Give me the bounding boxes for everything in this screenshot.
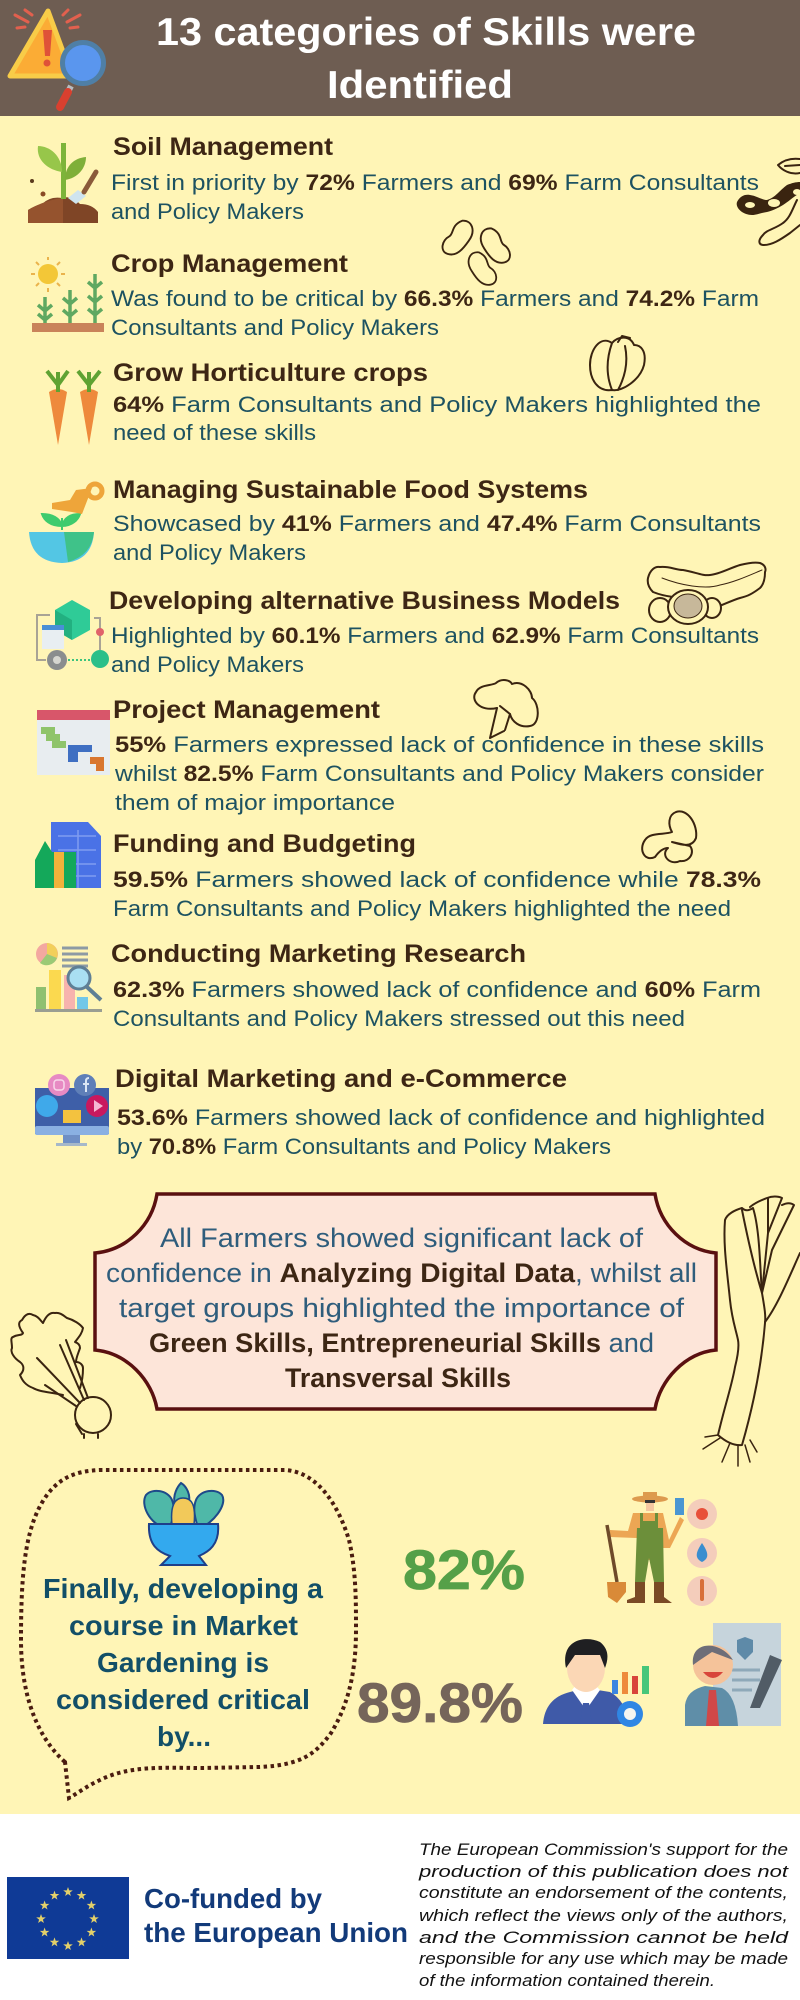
heading: Conducting Marketing Research bbox=[111, 940, 526, 968]
callout text bbox=[106, 1223, 697, 1393]
bubble text: Finally, developing a bbox=[43, 1573, 323, 1604]
heading: Crop Management bbox=[111, 250, 349, 278]
text block: Consultants and Policy Makers bbox=[111, 315, 439, 340]
bubble text: considered critical bbox=[56, 1684, 310, 1715]
icon: warning and magnifier bbox=[10, 10, 104, 107]
callout text: target groups highlighted the importance of bbox=[119, 1293, 685, 1323]
text block: and Policy Makers bbox=[111, 199, 304, 224]
title: 13 categories of Skills were bbox=[156, 11, 696, 54]
funding text: Co-funded by bbox=[144, 1883, 322, 1914]
text block bbox=[113, 392, 761, 445]
funding text: the European Union bbox=[144, 1917, 408, 1948]
text block: and Policy Makers bbox=[111, 652, 304, 677]
icon: gantt chart bbox=[37, 710, 110, 775]
text block: 55% Farmers expressed lack of confidence in these skills bbox=[115, 732, 764, 757]
statistic: 82%: 82% bbox=[403, 1538, 525, 1601]
icon: salad bowl bbox=[144, 1483, 223, 1565]
heading: Managing Sustainable Food Systems bbox=[113, 476, 588, 504]
callout text: Transversal Skills bbox=[285, 1363, 511, 1393]
illustration: bell pepper bbox=[590, 336, 645, 390]
heading: Project Management bbox=[113, 696, 381, 724]
section: Project Management bbox=[37, 696, 764, 815]
icon: sun and crop rows bbox=[31, 257, 104, 332]
icon: business process bbox=[37, 600, 109, 670]
text block: and Policy Makers bbox=[113, 540, 306, 565]
callout frame bbox=[95, 1194, 716, 1409]
text block: Was found to be critical by 66.3% Farmers and 74.2% Farm bbox=[111, 286, 759, 311]
illustration: leek bbox=[703, 1196, 800, 1466]
callout bbox=[95, 1194, 716, 1409]
text block: 59.5% Farmers showed lack of confidence while 78.3% bbox=[113, 867, 761, 892]
text block: whilst 82.5% Farm Consultants and Policy Makers consider bbox=[114, 761, 764, 786]
icon: carrots bbox=[47, 371, 100, 445]
bubble text bbox=[43, 1573, 323, 1752]
illustration: bean pair bbox=[642, 811, 696, 862]
text block bbox=[111, 623, 759, 677]
disclaimer: constitute an endorsement of the contents, bbox=[419, 1883, 788, 1902]
text block bbox=[111, 170, 759, 224]
icon: policy maker with document bbox=[685, 1623, 782, 1726]
section: Crop Management bbox=[31, 250, 759, 340]
disclaimer: and the Commission cannot be held bbox=[419, 1928, 789, 1947]
text block bbox=[111, 286, 759, 340]
EU flag bbox=[7, 1877, 129, 1959]
callout text: All Farmers showed significant lack of bbox=[160, 1223, 644, 1253]
callout text: Green Skills, Entrepreneurial Skills and bbox=[149, 1328, 654, 1358]
text block: Farm Consultants and Policy Makers highlighted the need bbox=[113, 896, 731, 921]
icon: seedling in soil bbox=[28, 143, 98, 223]
text block: by 70.8% Farm Consultants and Policy Makers bbox=[117, 1134, 611, 1159]
text block: need of these skills bbox=[113, 420, 316, 445]
disclaimer bbox=[418, 1840, 790, 1990]
disclaimer: responsible for any use which may be made bbox=[419, 1949, 788, 1968]
text block: Consultants and Policy Makers stressed out this need bbox=[113, 1006, 685, 1031]
disclaimer: The European Commission's support for the bbox=[419, 1840, 788, 1859]
heading: Developing alternative Business Models bbox=[109, 587, 620, 615]
disclaimer: which reflect the views only of the authors, bbox=[419, 1906, 788, 1925]
bubble text: Gardening is bbox=[97, 1647, 269, 1678]
text block: 62.3% Farmers showed lack of confidence and 60% Farm bbox=[113, 977, 761, 1002]
text block: 64% Farm Consultants and Policy Makers highlighted the bbox=[113, 392, 761, 417]
title bbox=[156, 11, 696, 107]
statistic: 89.8%: 89.8% bbox=[357, 1671, 523, 1734]
text block: Highlighted by 60.1% Farmers and 62.9% Farm Consultants bbox=[111, 623, 759, 648]
icon: monitor with social media bbox=[35, 1074, 109, 1146]
section: Managing Sustainable Food Systems bbox=[29, 476, 761, 565]
section: Digital Marketing and e-Commerce bbox=[35, 1065, 765, 1159]
icon: budget sheet and money bbox=[35, 822, 101, 888]
heading: Grow Horticulture crops bbox=[113, 359, 428, 387]
section: Conducting Marketing Research bbox=[35, 940, 761, 1031]
section: Funding and Budgeting bbox=[35, 822, 761, 921]
bubble text: course in Market bbox=[69, 1610, 298, 1641]
illustration: kidney beans bbox=[440, 216, 512, 289]
icon: watering can and earth bowl bbox=[29, 484, 102, 563]
funding text bbox=[144, 1883, 408, 1948]
disclaimer: of the information contained therein. bbox=[419, 1971, 715, 1990]
text block: Showcased by 41% Farmers and 47.4% Farm Consultants bbox=[113, 511, 761, 536]
text block: them of major importance bbox=[115, 790, 395, 815]
text block bbox=[113, 511, 761, 565]
icon: farmer bbox=[607, 1492, 717, 1606]
text block bbox=[113, 977, 761, 1031]
title: Identified bbox=[327, 64, 513, 107]
speech bubble bbox=[21, 1470, 356, 1798]
text block bbox=[113, 867, 761, 921]
section: Developing alternative Business Models bbox=[37, 587, 759, 677]
text block bbox=[117, 1105, 765, 1159]
icon: charts and magnifier bbox=[35, 943, 102, 1012]
footer bbox=[0, 1814, 800, 2000]
text block: First in priority by 72% Farmers and 69% Farm Consultants bbox=[111, 170, 759, 195]
section: Soil Management bbox=[28, 133, 759, 224]
bubble text: by... bbox=[157, 1721, 211, 1752]
heading: Soil Management bbox=[113, 133, 334, 161]
text block: 53.6% Farmers showed lack of confidence and highlighted bbox=[117, 1105, 765, 1130]
callout text: confidence in Analyzing Digital Data , whilst all bbox=[106, 1258, 697, 1288]
text block bbox=[114, 732, 764, 815]
illustration: zucchini bbox=[648, 563, 765, 624]
dotted bubble outline bbox=[21, 1470, 356, 1798]
section: Grow Horticulture crops bbox=[47, 359, 761, 445]
disclaimer: production of this publication does not bbox=[418, 1862, 790, 1881]
illustration: turnip bbox=[11, 1313, 111, 1438]
heading: Funding and Budgeting bbox=[113, 830, 416, 858]
icon: businessman with chart bbox=[543, 1639, 649, 1727]
heading: Digital Marketing and e-Commerce bbox=[115, 1065, 567, 1093]
illustration: broccoli bbox=[474, 680, 538, 738]
illustration: soybean pod bbox=[737, 159, 800, 245]
header band bbox=[0, 0, 800, 116]
